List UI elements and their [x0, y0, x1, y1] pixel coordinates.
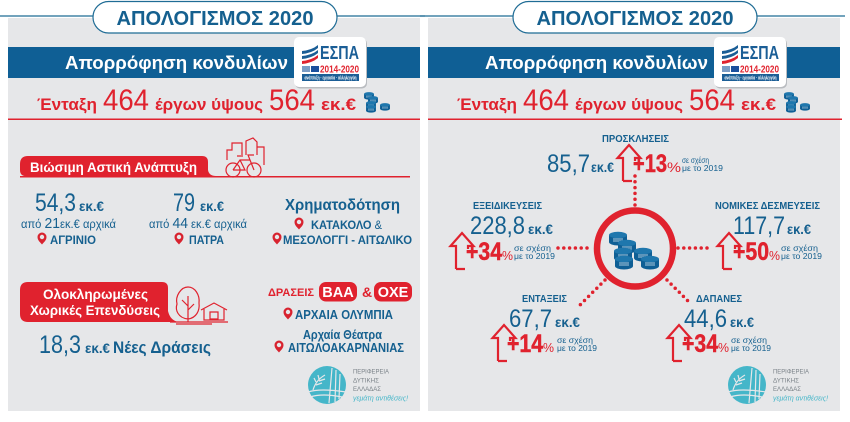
left header: title, absorption band, ESPA logo, totals — [0, 2, 425, 411]
stat: calls: με το 2019 — [682, 163, 723, 173]
stat: specialisations: εκ.€ — [528, 221, 553, 237]
central ring with coins — [597, 210, 673, 286]
stat: calls: ΠΡΟΣΚΛΗΣΕΙΣ — [602, 133, 669, 145]
actions: BAA and OXE badges: & — [362, 284, 372, 300]
stat: inclusions: 67,7 — [509, 305, 552, 333]
stat: new actions — [39, 331, 211, 359]
panel: right summary — [420, 2, 845, 411]
logo: Region of Western Greece — [728, 366, 828, 404]
funding: Katakolo, Messolonghi — [272, 197, 412, 247]
stat: inclusions: σε σχέση — [557, 335, 593, 345]
funding: Katakolo, Messolonghi: ΜΕΣΟΛΟΓΓΙ - ΑΙΤΩΛΙΚΟ — [283, 233, 412, 247]
stat: expenditure: % — [718, 340, 729, 355]
icon: city and bicycle — [226, 138, 264, 177]
location: Ancient Olympia: ΑΡΧΑΙΑ ΟΛΥΜΠΙΑ — [295, 308, 393, 322]
stat: Agrinio: 54,3 — [35, 189, 76, 217]
dotted connectors — [558, 176, 712, 305]
stat: specialisations: με το 2019 — [514, 251, 555, 261]
red rule — [8, 118, 420, 120]
stat: expenditure — [668, 293, 771, 361]
stat: specialisations: ΕΞΕΙΔΙΚΕΥΣΕΙΣ — [473, 200, 542, 212]
funding: Katakolo, Messolonghi: Χρηματοδότηση — [285, 197, 400, 214]
stat: legal commitments — [715, 200, 822, 269]
stat: expenditure: σε σχέση — [731, 335, 767, 345]
stat: inclusions: +14 — [507, 330, 543, 358]
stat: legal commitments: σε σχέση — [781, 243, 818, 253]
actions: BAA and OXE badges: ΟΧΕ — [378, 285, 409, 301]
heading: completed rural investments — [20, 282, 178, 322]
stat: calls — [547, 133, 723, 181]
stat: legal commitments: με το 2019 — [781, 251, 822, 261]
stat: Agrinio — [21, 189, 116, 247]
actions: BAA and OXE badges: ΔΡΑΣΕΙΣ — [268, 287, 314, 299]
stat: inclusions: ΕΝΤΑΞΕΙΣ — [522, 293, 567, 305]
stat: specialisations: +34 — [466, 238, 502, 266]
heading: sustainable urban development: Βιώσιμη Αστική Ανάπτυξη — [30, 159, 197, 175]
stat: Patra — [149, 189, 247, 247]
stat: legal commitments: ΝΟΜΙΚΕΣ ΔΕΣΜΕΥΣΕΙΣ — [715, 200, 820, 212]
stat: new actions: 18,3 — [39, 331, 81, 359]
stat: inclusions — [492, 293, 597, 361]
stat: Patra: ΠΑΤΡΑ — [189, 233, 224, 247]
panel: left summary — [0, 2, 425, 411]
stat: Agrinio: ΑΓΡΙΝΙΟ — [50, 233, 96, 247]
stat: specialisations: 228,8 — [470, 212, 525, 240]
stat: expenditure: ΔΑΠΑΝΕΣ — [696, 293, 742, 305]
heading: completed rural investments: Χωρικές Επενδύσεις — [30, 302, 160, 318]
heading: completed rural investments: Ολοκληρωμένες — [43, 286, 148, 302]
stat: calls: σε σχέση — [682, 155, 709, 165]
funding: Katakolo, Messolonghi: ΚΑΤΑΚΟΛΟ & — [311, 218, 382, 232]
stat: Patra: 79 — [173, 189, 195, 217]
stat: specialisations: σε σχέση — [514, 243, 551, 253]
actions: BAA and OXE badges — [268, 282, 412, 302]
stat: expenditure: +34 — [682, 330, 718, 358]
stat: calls: 85,7 — [547, 150, 590, 178]
stat: Agrinio: από 21εκ.€ αρχικά — [21, 215, 116, 232]
stat: inclusions: εκ.€ — [555, 314, 580, 330]
stat: legal commitments: +50 — [733, 238, 769, 266]
stat: specialisations: % — [502, 248, 513, 263]
stat: legal commitments: % — [769, 248, 780, 263]
stat: specialisations — [450, 200, 555, 269]
stat: expenditure: εκ.€ — [730, 314, 754, 330]
right header: title, absorption band, ESPA logo, totals — [420, 2, 845, 411]
stat: calls: εκ.€ — [591, 159, 614, 175]
stat: calls: +13 — [633, 150, 667, 178]
heading: sustainable urban development — [20, 156, 410, 178]
actions: BAA and OXE badges: ΒΑΑ — [322, 285, 354, 301]
location: Ancient theatres: Αρχαία Θέατρα — [303, 328, 382, 342]
stat: expenditure: με το 2019 — [731, 343, 771, 353]
stat: expenditure: 44,6 — [684, 305, 727, 333]
logo: Region of Western Greece — [308, 366, 408, 404]
stat: Patra: εκ.€ — [200, 198, 224, 214]
stat: Patra: από 44 εκ.€ αρχικά — [149, 215, 247, 232]
stat: new actions: Νέες Δράσεις — [113, 339, 211, 357]
red rule — [428, 118, 842, 120]
stat: new actions: εκ.€ — [85, 340, 110, 356]
icon: tree and house — [170, 287, 228, 324]
location: Ancient theatres — [274, 328, 404, 355]
stat: calls: % — [667, 159, 681, 175]
stat: legal commitments: εκ.€ — [787, 221, 811, 237]
stat: inclusions: με το 2019 — [557, 343, 597, 353]
stat: Agrinio: εκ.€ — [79, 198, 104, 214]
stat: legal commitments: 117,7 — [733, 212, 785, 240]
stat: inclusions: % — [543, 340, 554, 355]
location: Ancient theatres: ΑΙΤΩΛΟΑΚΑΡΝΑΝΙΑΣ — [288, 341, 404, 355]
